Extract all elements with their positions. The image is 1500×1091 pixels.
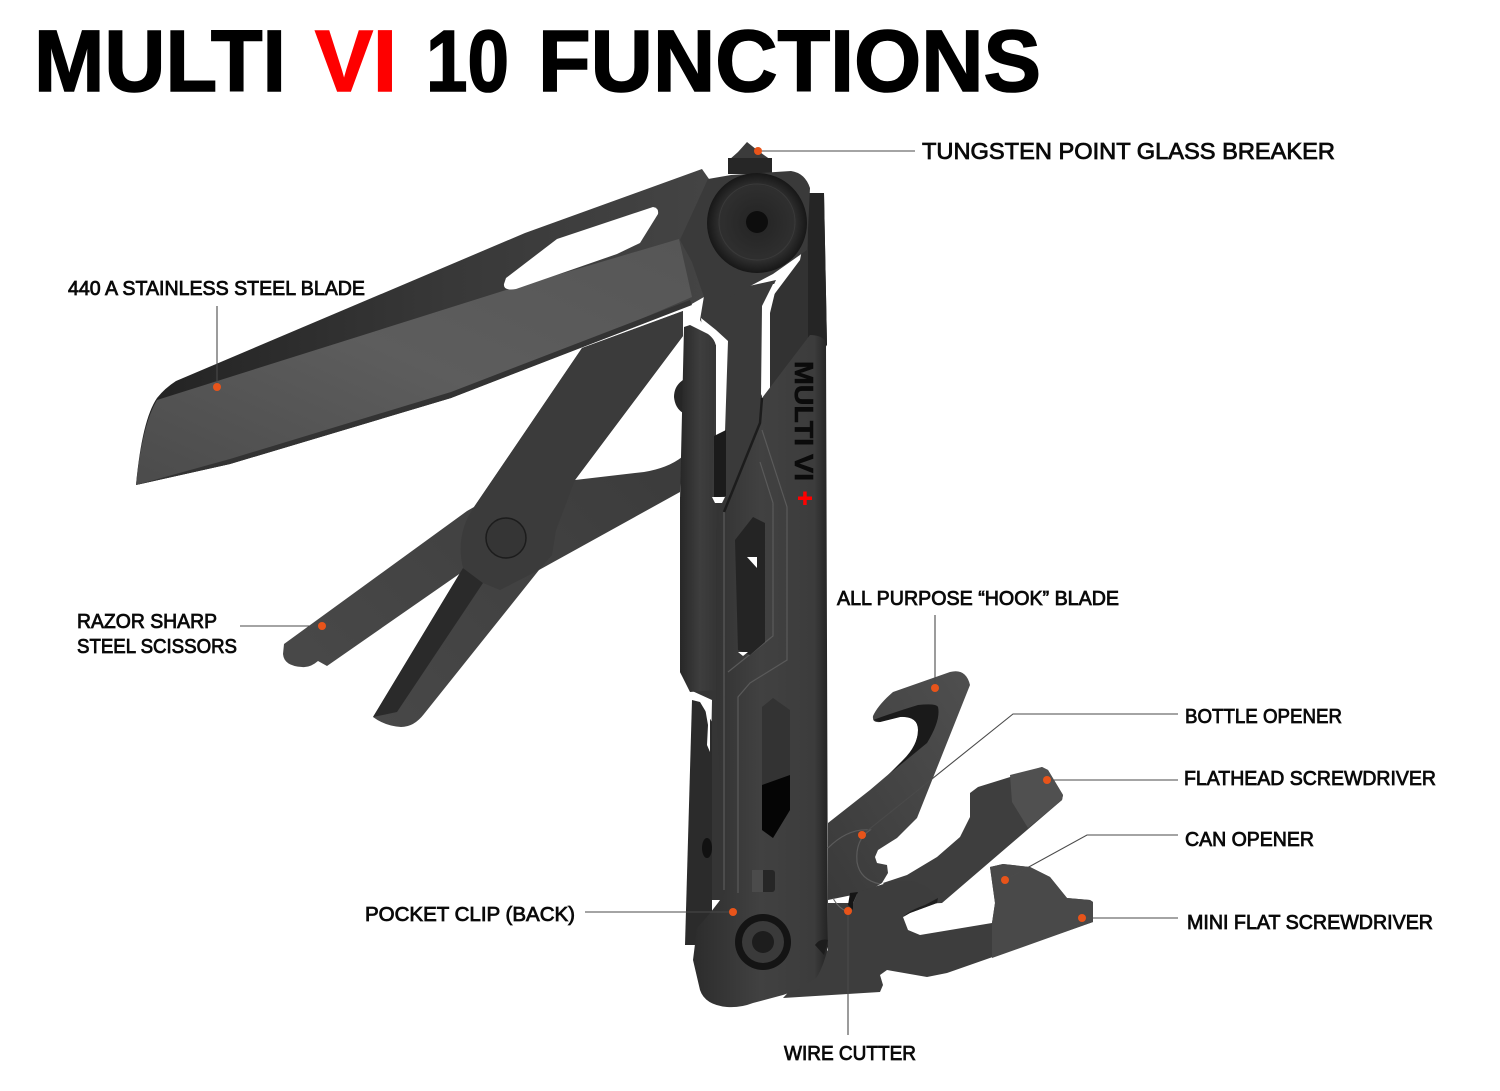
pivot housing: [680, 171, 810, 303]
scissors pivot: [486, 518, 526, 558]
label: scissors: STEEL SCISSORS: [77, 636, 237, 658]
bottom tool: [783, 864, 1093, 998]
bottle opener ridge: [828, 830, 880, 884]
tungsten tip: [728, 142, 772, 174]
square slot: [752, 870, 775, 892]
label: can opener: CAN OPENER: [1185, 829, 1314, 851]
label: flathead screwdriver: [1043, 768, 1436, 790]
label: wire cutter: [784, 907, 916, 1065]
main handle: [693, 335, 828, 1007]
mid body fill: [680, 497, 735, 900]
label: flathead screwdriver: FLATHEAD SCREWDRIVER: [1184, 768, 1436, 790]
title: [34, 13, 1041, 110]
label: wire cutter: WIRE CUTTER: [784, 1043, 916, 1065]
clip hole: [702, 838, 712, 858]
title: MULTI: [34, 13, 286, 110]
flathead screwdriver: [883, 767, 1063, 905]
window lower: [762, 698, 790, 838]
engraved logo: MULTI VI: [789, 361, 819, 481]
pivot disc: [707, 173, 807, 273]
left pocket clip rivet: [674, 380, 683, 413]
lower clip: [685, 700, 712, 945]
title: FUNCTIONS: [538, 13, 1041, 110]
blade slot: [504, 207, 658, 289]
tools: [783, 671, 1093, 998]
label: bottle opener: [858, 706, 1342, 839]
label: mini flat screwdriver: [1078, 912, 1433, 934]
window upper: [735, 517, 765, 655]
small notch: [815, 940, 828, 955]
bottom screw: [735, 914, 791, 970]
label: scissors: [77, 611, 326, 658]
label: hook blade: [837, 588, 1119, 692]
main blade: [136, 169, 709, 485]
label: pocket clip: [365, 904, 737, 926]
wire cutter notch: [833, 898, 848, 912]
white slit: [761, 284, 777, 396]
label: bottle opener: BOTTLE OPENER: [1185, 706, 1342, 728]
label: stainless steel blade: 440 A STAINLESS STEEL BLADE: [68, 278, 365, 300]
scissors handle arm: [714, 430, 726, 498]
centre bar: [700, 280, 776, 505]
multitool illustration: [136, 142, 1093, 1007]
label: can opener: [1001, 829, 1314, 884]
label: stainless steel blade: [68, 278, 365, 391]
white gap: [701, 318, 728, 436]
label: scissors: RAZOR SHARP: [77, 611, 217, 633]
scissors: [283, 311, 683, 727]
label: pocket clip: POCKET CLIP (BACK): [365, 904, 575, 926]
label: tungsten point glass breaker: [754, 138, 1335, 164]
title: VI: [315, 13, 397, 110]
hook blade: [828, 671, 970, 900]
label: tungsten point glass breaker: TUNGSTEN POINT GLASS BREAKER: [922, 138, 1335, 164]
ridges: [724, 430, 787, 893]
pocket clip upper: [680, 325, 720, 692]
label: mini flat screwdriver: MINI FLAT SCREWDRIVER: [1187, 912, 1433, 934]
label: hook blade: ALL PURPOSE “HOOK” BLADE: [837, 588, 1119, 610]
title: 10: [426, 13, 509, 110]
shadow edge: [724, 398, 762, 512]
white notch lower: [704, 702, 710, 752]
notch: [712, 497, 725, 503]
upper back column: [770, 193, 827, 400]
